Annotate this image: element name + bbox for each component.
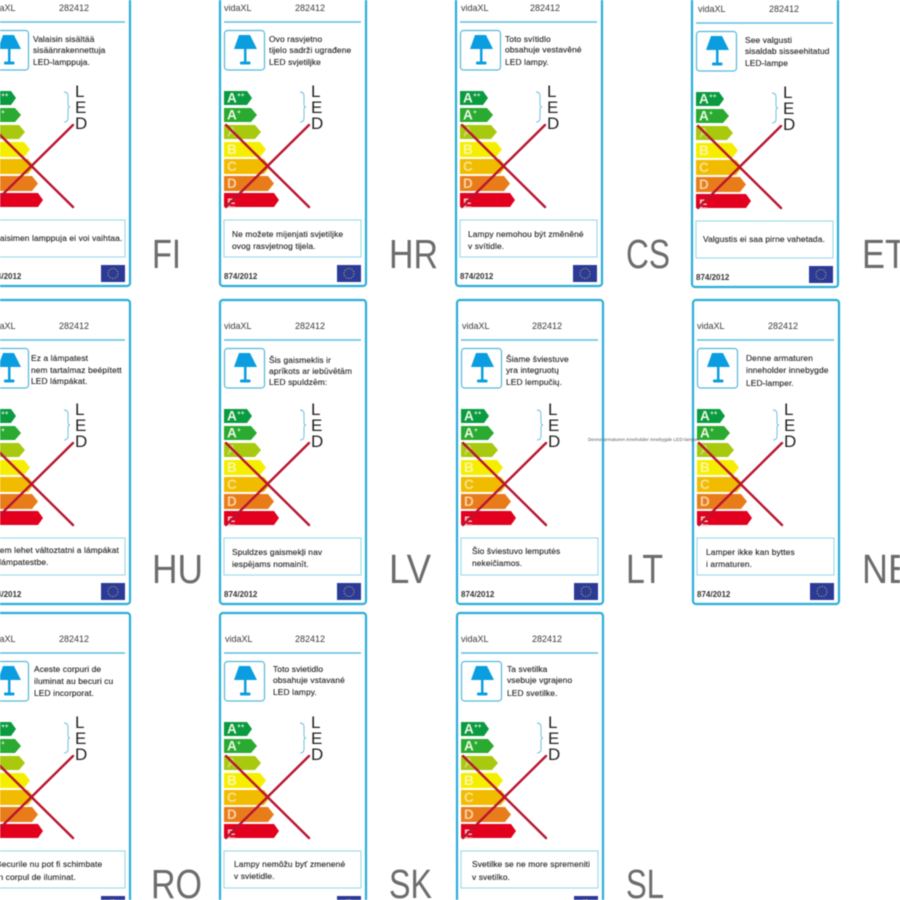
header: brand and model: 282412 (59, 321, 89, 331)
chart: energy scale with cross: D (227, 807, 237, 822)
country code: LT: LT (626, 546, 663, 592)
header: brand and model: vidaXL (697, 321, 725, 331)
text: regulation number: 874/2012 (224, 590, 258, 599)
text: fixture statement: Šiame šviestuve (506, 354, 569, 364)
text: replacement notice: v svítidle. (468, 241, 504, 251)
text: fixture statement: LED-lamper. (746, 378, 794, 388)
panel: ET label (692, 0, 838, 287)
chart: energy scale with cross: A (463, 90, 473, 106)
chart: energy scale with cross: E (227, 827, 236, 842)
chart: energy scale with cross: C (464, 477, 474, 492)
chart: energy scale with cross (461, 400, 560, 529)
chart: energy scale with cross: D (464, 494, 474, 509)
chart: energy scale with cross: E (464, 827, 473, 842)
chart: energy scale with cross: B (699, 143, 709, 158)
header: brand and model: 282412 (532, 634, 562, 644)
chart: energy scale with cross: D (464, 807, 474, 822)
chart: energy scale with cross: L (311, 713, 320, 732)
panel: FI label (0, 0, 130, 286)
chart: energy scale with cross: L (311, 82, 320, 101)
chart: energy scale with cross: A (227, 738, 237, 754)
chart: energy scale with cross: A (464, 756, 474, 770)
chart: energy scale with cross: + (473, 109, 477, 116)
chart: energy scale with cross: A (227, 108, 237, 122)
chart: energy scale with cross: E (463, 196, 472, 211)
chart: energy scale with cross: E (783, 99, 794, 118)
chart: energy scale with cross: C (227, 159, 237, 174)
chart: energy scale with cross: A (227, 90, 237, 106)
chart: energy scale with cross: D (547, 114, 559, 133)
text: fixture statement: vsebuje vgrajeno (507, 675, 572, 685)
text: fixture statement: iluminat au becuri cu (34, 676, 114, 686)
chart: energy scale with cross: D (311, 114, 323, 133)
chart: energy scale with cross: C (227, 477, 237, 492)
text: fixture statement: LED-lamppuja. (33, 57, 90, 67)
chart: energy scale with cross: D (311, 432, 323, 451)
text: fixture statement: Toto svítidlo (505, 34, 551, 44)
chart: energy scale with cross: + (1, 427, 5, 434)
text: fixture statement: sisaldab sisseehitatud (745, 46, 830, 56)
chart: energy scale with cross: E (75, 416, 86, 435)
chart: energy scale with cross: B (227, 773, 237, 788)
chart: energy scale with cross: D (699, 177, 709, 192)
chart: energy scale with cross: A (227, 756, 237, 770)
chart: energy scale with cross (224, 713, 323, 842)
chart: energy scale with cross: B (464, 773, 474, 788)
chart: energy scale with cross: D (311, 745, 323, 764)
chart: energy scale with cross: A (227, 442, 237, 458)
text: fixture statement: obsahuje vstavané (273, 675, 345, 685)
header: brand and model: 282412 (532, 321, 562, 331)
chart: energy scale with cross: ++ (237, 723, 245, 730)
chart: energy scale with cross: A (700, 408, 710, 424)
chart: energy scale with cross (224, 400, 323, 529)
header: brand and model: vidaXL (461, 3, 489, 13)
header: brand and model: 282412 (769, 4, 799, 14)
chart: energy scale with cross: ++ (1, 410, 9, 417)
text: fixture statement: Ta svetilka (507, 664, 548, 674)
chart: energy scale with cross: D (784, 432, 796, 451)
chart: energy scale with cross: + (474, 427, 478, 434)
text: replacement notice: Svetilke se ne more spremeniti (472, 859, 590, 869)
chart: energy scale with cross: A (227, 722, 237, 736)
chart: energy scale with cross: D (227, 176, 237, 191)
text: fixture statement: Ovo rasvjetno (269, 34, 322, 44)
header: brand and model: vidaXL (224, 321, 252, 331)
text: replacement notice: Lampy nemôžu byť zmenené (234, 859, 345, 869)
chart: energy scale with cross: L (75, 82, 84, 101)
icon: EU flag (337, 583, 361, 600)
chart: energy scale with cross: E (311, 416, 322, 435)
chart: energy scale with cross: D (75, 432, 87, 451)
text: fixture statement: Denne armaturen (746, 353, 813, 363)
chart: energy scale with cross: + (474, 740, 478, 747)
text: replacement notice: Šio šviestuvo lemputės (472, 546, 560, 556)
icon: lamp (224, 30, 264, 70)
chart: energy scale with cross: + (710, 427, 714, 434)
text: fixture statement: LED lampy. (273, 687, 317, 697)
header: brand and model: vidaXL (462, 321, 490, 331)
chart: energy scale with cross (0, 713, 87, 842)
country code: LV: LV (389, 546, 432, 592)
header: brand and model: 282412 (295, 3, 325, 13)
text: regulation number: 874/2012 (696, 273, 730, 282)
chart: energy scale with cross: A (699, 108, 709, 124)
header: brand and model: 282412 (59, 3, 89, 13)
chart: energy scale with cross: E (75, 729, 86, 748)
chart: energy scale with cross (224, 82, 323, 211)
chart: energy scale with cross: + (237, 740, 241, 747)
chart: energy scale with cross: L (75, 713, 84, 732)
chart: energy scale with cross: A (700, 426, 710, 440)
icon: EU flag (101, 896, 125, 900)
chart: energy scale with cross: C (700, 477, 710, 492)
panel: NE label (693, 300, 839, 604)
chart: energy scale with cross: L (783, 83, 792, 102)
chart: energy scale with cross: A (699, 92, 709, 106)
header: brand and model: 282412 (295, 634, 325, 644)
chart: energy scale with cross: + (1, 109, 5, 116)
panel: HR label (220, 0, 366, 286)
icon: EU flag (810, 583, 834, 600)
text: fixture statement: yra integruotų (506, 365, 559, 375)
text: fixture statement: Aceste corpuri de (34, 664, 101, 674)
icon: lamp (698, 348, 738, 388)
icon: lamp (224, 662, 264, 701)
panel: RO label (0, 613, 130, 900)
text: replacement notice: Lampy nemohou být změněné (468, 229, 584, 239)
text: fixture statement: inneholder innebygde (746, 365, 829, 375)
chart: energy scale with cross: + (709, 110, 713, 117)
header: brand and model: vidaXL (461, 634, 489, 644)
chart: energy scale with cross (696, 83, 795, 212)
chart: energy scale with cross: D (548, 745, 560, 764)
chart: energy scale with cross: ++ (237, 92, 245, 99)
header: brand and model: 282412 (530, 3, 560, 13)
chart: energy scale with cross: ++ (473, 92, 481, 99)
text: fixture statement: LED spuldzēm: (269, 377, 327, 387)
text: regulation number: 874/2012 (460, 272, 494, 281)
text: fixture statement: LED lempučių. (506, 377, 562, 387)
header: brand and model: 282412 (295, 321, 325, 331)
chart: energy scale with cross: D (783, 115, 795, 134)
text: fixture statement: LED-lampe (745, 58, 788, 68)
chart: energy scale with cross: A (699, 126, 709, 140)
chart: energy scale with cross: E (227, 514, 236, 529)
country code: HR: HR (389, 231, 438, 277)
chart: energy scale with cross: A (463, 108, 473, 122)
chart: energy scale with cross: ++ (1, 92, 9, 99)
country code: FI: FI (152, 231, 181, 277)
icon: lamp (224, 348, 264, 388)
chart: energy scale with cross: ++ (474, 723, 482, 730)
chart: energy scale with cross: D (548, 432, 560, 451)
chart: energy scale with cross: E (700, 514, 709, 529)
text: regulation number: 874/2012 (224, 272, 258, 281)
panel: CS label (456, 0, 602, 286)
chart: energy scale with cross: E (784, 416, 795, 435)
panel: LT label (457, 300, 603, 604)
icon: lamp (462, 348, 502, 388)
chart: energy scale with cross: D (463, 176, 473, 191)
chart: energy scale with cross: A (227, 408, 237, 424)
icon: EU flag (573, 265, 597, 282)
panel: SL label (457, 613, 603, 900)
chart: energy scale with cross (697, 400, 796, 529)
text: regulation number: 874/2012 (697, 590, 731, 599)
text: fixture statement: sisäänrakennettuja (33, 45, 106, 55)
text: fixture statement: aprīkots ar iebūvētām (269, 366, 352, 376)
country code: HU: HU (152, 546, 203, 592)
chart: energy scale with cross: C (464, 790, 474, 805)
text: fixture statement: LED svetilke. (507, 688, 557, 698)
chart: energy scale with cross: D (700, 494, 710, 509)
chart: energy scale with cross: E (227, 196, 236, 211)
chart: energy scale with cross (460, 82, 559, 211)
chart: energy scale with cross: D (227, 494, 237, 509)
text: fixture statement: obsahuje vestavěné (505, 44, 582, 54)
chart: energy scale with cross: C (699, 160, 709, 175)
text: replacement notice: Ne možete mijenjati svjetiljke (232, 229, 343, 239)
text: fixture statement: Šis gaismeklis ir (269, 355, 331, 365)
chart: energy scale with cross (0, 400, 87, 529)
chart: energy scale with cross: C (463, 159, 473, 174)
chart: energy scale with cross: A (464, 738, 474, 754)
panel: LV label (220, 300, 366, 604)
chart: energy scale with cross: L (311, 400, 320, 419)
text: replacement notice: iespējams nomainīt. (232, 559, 309, 569)
chart: energy scale with cross: ++ (474, 410, 482, 417)
chart: energy scale with cross: ++ (709, 93, 717, 100)
icon: EU flag (574, 896, 598, 900)
chart: energy scale with cross: E (311, 98, 322, 117)
icon: EU flag (574, 583, 598, 600)
icon: EU flag (809, 266, 833, 283)
text: fixture statement: Toto svietidlo (273, 664, 323, 674)
chart: energy scale with cross: A (464, 722, 474, 736)
panel: HU label (0, 300, 130, 604)
chart: energy scale with cross: A (227, 124, 237, 140)
text: fixture statement: See valgusti (745, 35, 792, 45)
chart: energy scale with cross: ++ (710, 410, 718, 417)
text: fixture statement: Valaisin sisältää (33, 34, 95, 44)
icon: lamp (0, 348, 28, 388)
chart: energy scale with cross: D (75, 114, 87, 133)
chart: energy scale with cross: B (227, 142, 237, 157)
chart: energy scale with cross: + (237, 427, 241, 434)
chart: energy scale with cross: L (784, 400, 793, 419)
chart: energy scale with cross: E (75, 98, 86, 117)
text: regulation number: 874/2012 (461, 590, 495, 599)
chart: energy scale with cross: E (548, 416, 559, 435)
text: replacement notice: i armaturen. (706, 559, 752, 569)
chart: energy scale with cross: A (227, 426, 237, 440)
chart: energy scale with cross (461, 713, 560, 842)
icon: lamp (0, 662, 28, 701)
text: fixture statement: LED lámpákat. (31, 376, 88, 386)
text: fixture statement: LED incorporat. (34, 688, 94, 698)
chart: energy scale with cross: ++ (237, 410, 245, 417)
text: fixture statement: nem tartalmaz beépített (31, 365, 122, 375)
icon: lamp (460, 30, 500, 70)
country code: CS: CS (626, 231, 670, 277)
icon: EU flag (101, 265, 125, 282)
header: brand and model: 282412 (768, 321, 798, 331)
header: brand and model: 282412 (59, 634, 89, 644)
text: fixture statement: Ez a lámpatest (31, 353, 89, 363)
chart: energy scale with cross: + (1, 740, 5, 747)
icon: lamp (696, 32, 736, 71)
stray caption: Denne armaturen inneholder innebygde LED-lamper. (588, 437, 700, 442)
icon: EU flag (337, 265, 361, 282)
chart: energy scale with cross: A (464, 426, 474, 440)
chart: energy scale with cross: ++ (1, 723, 9, 730)
icon: lamp (0, 30, 28, 70)
chart: energy scale with cross: L (75, 400, 84, 419)
text: fixture statement: LED lampy. (505, 57, 549, 67)
chart: energy scale with cross: C (227, 790, 237, 805)
text: replacement notice: ovog rasvjetnog tijela. (232, 241, 316, 251)
chart: energy scale with cross: E (548, 729, 559, 748)
chart: energy scale with cross: B (227, 460, 237, 475)
text: fixture statement: LED svjetiljke (269, 57, 321, 67)
chart: energy scale with cross: B (700, 460, 710, 475)
text: replacement notice: Valgustis ei saa pirne vahetada. (703, 234, 825, 244)
chart: energy scale with cross: E (547, 98, 558, 117)
icon: lamp (462, 662, 502, 701)
text: replacement notice: Lamper ikke kan byttes (706, 547, 795, 557)
header: brand and model: vidaXL (225, 634, 253, 644)
chart: energy scale with cross: A (700, 442, 710, 458)
icon: EU flag (101, 583, 125, 600)
text: replacement notice: Spuldzes gaismekļi nav (232, 547, 323, 557)
chart: energy scale with cross: A (464, 408, 474, 424)
icon: EU flag (337, 896, 361, 900)
chart: energy scale with cross: B (463, 142, 473, 157)
text: replacement notice: v svietidle. (234, 871, 275, 881)
panel: SK label (220, 613, 366, 900)
chart: energy scale with cross: E (464, 514, 473, 529)
chart: energy scale with cross: D (75, 745, 87, 764)
chart: energy scale with cross: E (311, 729, 322, 748)
text: replacement notice: nekeičiamos. (472, 558, 522, 568)
chart: energy scale with cross: L (548, 400, 557, 419)
chart: energy scale with cross: A (464, 442, 474, 458)
chart: energy scale with cross: B (464, 460, 474, 475)
chart: energy scale with cross: A (463, 124, 473, 140)
chart: energy scale with cross: E (699, 197, 708, 212)
chart: energy scale with cross (0, 82, 87, 211)
text: fixture statement: tijelo sadrži ugrađene (269, 45, 351, 55)
chart: energy scale with cross: L (547, 82, 556, 101)
chart: energy scale with cross: + (237, 109, 241, 116)
text: replacement notice: v svetilko. (472, 872, 510, 882)
header: brand and model: vidaXL (224, 3, 252, 13)
header: brand and model: vidaXL (698, 4, 726, 14)
chart: energy scale with cross: L (548, 713, 557, 732)
